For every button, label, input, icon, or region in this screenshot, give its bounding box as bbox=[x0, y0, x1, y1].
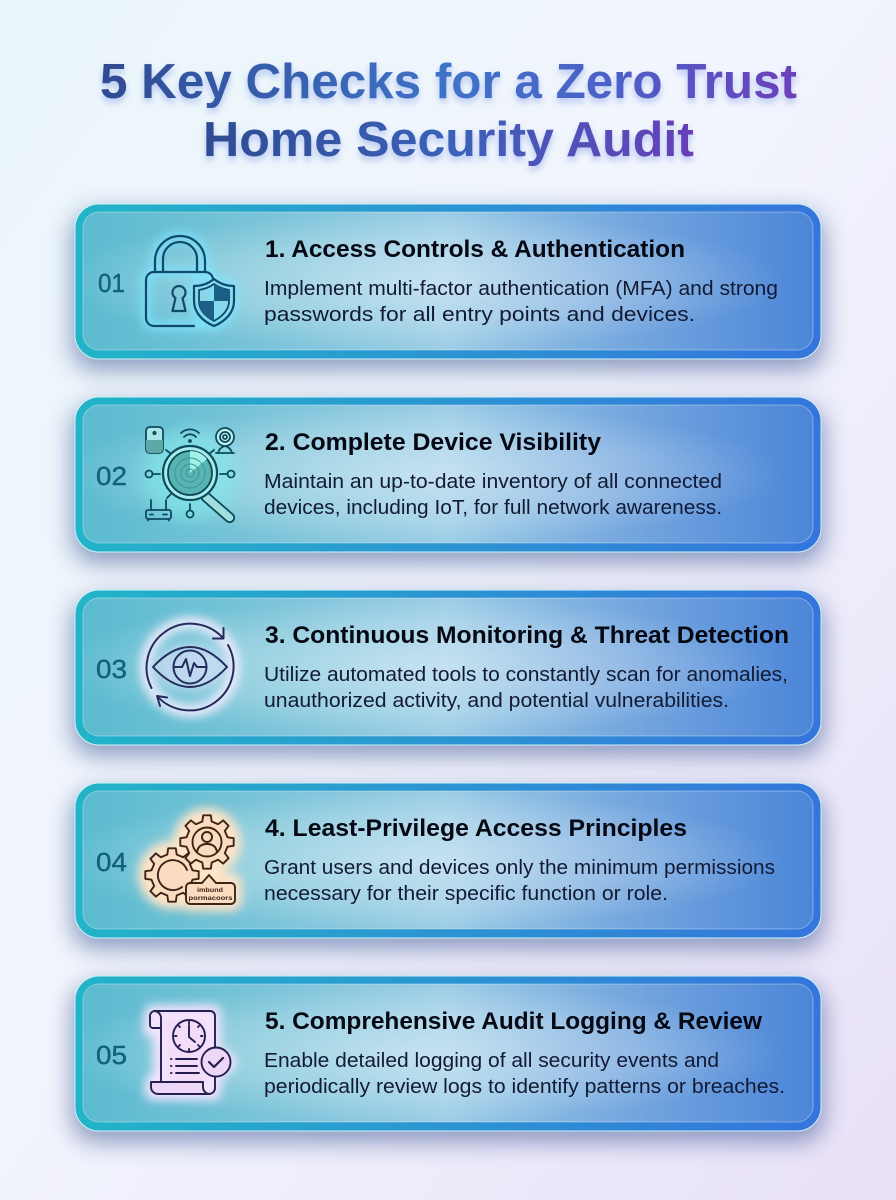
title: Home Security Audit bbox=[203, 117, 694, 171]
icon: gears with user and permission tag bbox=[145, 815, 235, 904]
heading 4: 4. Least-Privilege Access Principles bbox=[265, 815, 687, 842]
panel: check 1 access controls bbox=[72, 204, 824, 370]
panel: check 2 device visibility bbox=[72, 397, 824, 563]
body text 5 bbox=[264, 1050, 785, 1098]
number 02: 02 bbox=[96, 461, 127, 491]
panel: check 4 least privilege bbox=[72, 783, 824, 949]
heading 2: 2. Complete Device Visibility bbox=[265, 429, 602, 456]
heading 1: 1. Access Controls & Authentication bbox=[265, 236, 685, 263]
body text 5: Enable detailed logging of all security events and bbox=[264, 1050, 719, 1072]
body text 5: periodically review logs to identify patterns or breaches. bbox=[264, 1076, 785, 1098]
body text 3: unauthorized activity, and potential vulnerabilities. bbox=[264, 690, 729, 712]
icon: padlock with shield bbox=[146, 236, 234, 326]
icon: log scroll with clock and check bbox=[150, 1011, 230, 1094]
number 03: 03 bbox=[96, 654, 127, 684]
body text 2: devices, including IoT, for full network awareness. bbox=[264, 497, 722, 519]
number 01: 01 bbox=[98, 268, 125, 298]
body text 3 bbox=[264, 664, 788, 712]
title bbox=[100, 55, 797, 171]
title: Home Security Audit bbox=[203, 113, 694, 167]
body text 4 bbox=[264, 857, 775, 905]
number 04: 04 bbox=[96, 847, 127, 877]
icon: eye with circular arrows bbox=[146, 623, 234, 711]
panel: check 5 audit logging bbox=[72, 976, 824, 1142]
body text 1: Implement multi-factor authentication (MFA) and strong bbox=[264, 278, 778, 300]
body text 2 bbox=[264, 471, 722, 519]
body text 4: necessary for their specific function or role. bbox=[264, 883, 668, 905]
title: 5 Key Checks for a Zero Trust bbox=[100, 55, 797, 109]
number 05: 05 bbox=[96, 1040, 127, 1070]
body text 1: passwords for all entry points and devices. bbox=[264, 304, 695, 326]
body text 2: Maintain an up-to-date inventory of all connected bbox=[264, 471, 722, 493]
icon: gears with user and permission tag: pormacoors bbox=[188, 896, 233, 902]
icon: gears with user and permission tag: imbund bbox=[197, 888, 223, 894]
title: 5 Key Checks for a Zero Trust bbox=[100, 59, 797, 113]
body text 1 bbox=[264, 278, 778, 326]
heading 5: 5. Comprehensive Audit Logging & Review bbox=[265, 1008, 762, 1035]
icon: radar magnifier with devices bbox=[142, 427, 238, 524]
panel: check 3 monitoring bbox=[72, 590, 824, 756]
body text 4: Grant users and devices only the minimum permissions bbox=[264, 857, 775, 879]
heading 3: 3. Continuous Monitoring & Threat Detection bbox=[265, 622, 789, 649]
body text 3: Utilize automated tools to constantly scan for anomalies, bbox=[264, 664, 788, 686]
